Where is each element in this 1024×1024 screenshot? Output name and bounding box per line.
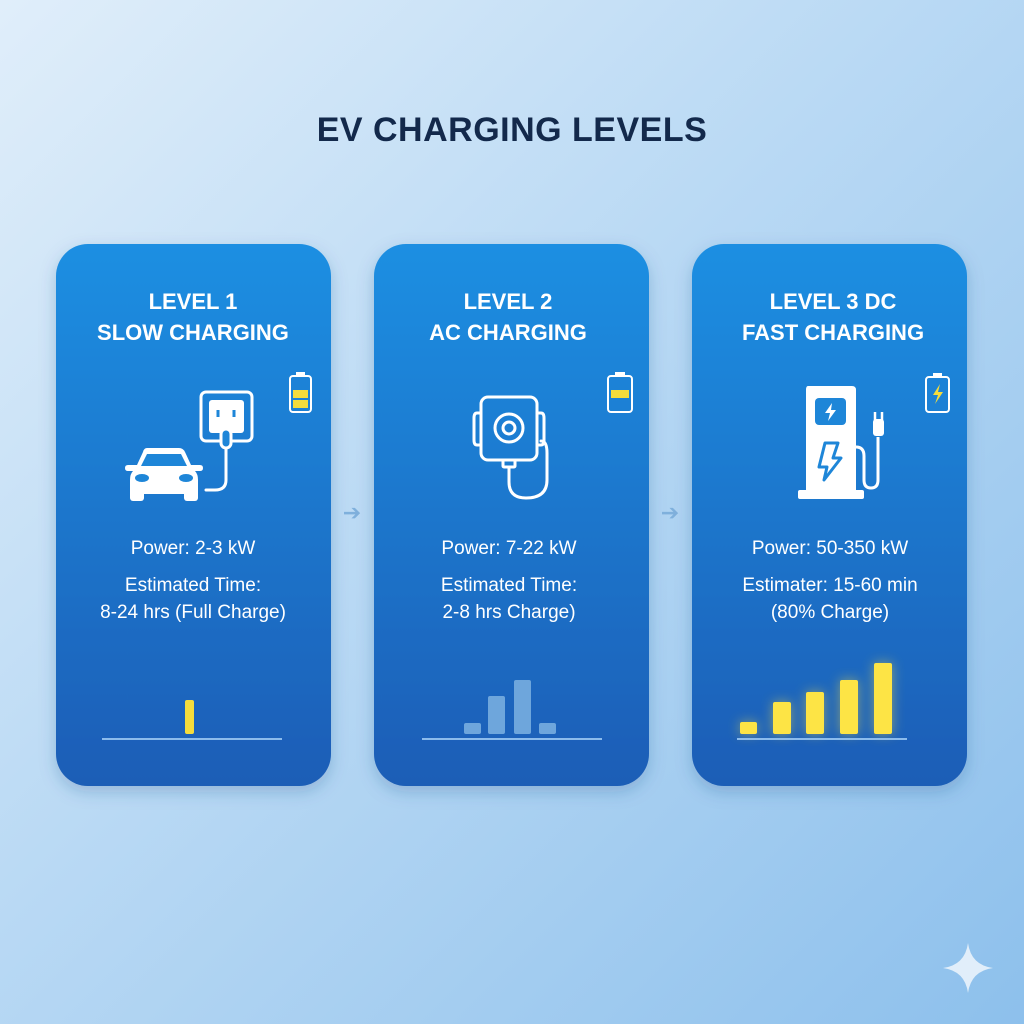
text: level 1 details: Power: 2-3 kW <box>131 538 255 559</box>
panel: level 3 <box>692 244 967 786</box>
heading: level 3: LEVEL 3 DC <box>770 289 896 314</box>
icon: battery level 1 <box>290 372 311 412</box>
heading: level 1: LEVEL 1 <box>149 289 237 314</box>
text: level 1 details: Estimated Time: <box>125 575 261 596</box>
arrow 2: ➔ <box>661 500 679 525</box>
icon: wall charger <box>474 397 547 498</box>
text: level 3 details: Estimater: 15-60 min <box>742 575 918 596</box>
icon: battery level 3 <box>926 373 949 412</box>
title: EV CHARGING LEVELS <box>317 111 707 149</box>
heading: level 3: FAST CHARGING <box>742 320 924 345</box>
chart: level 2 <box>422 680 602 739</box>
heading: level 2: LEVEL 2 <box>464 289 552 314</box>
icon: fast charging station <box>798 386 884 499</box>
arrow 1: ➔ <box>343 500 361 525</box>
chart: level 1 <box>102 700 282 739</box>
text: level 2 details: 2-8 hrs Charge) <box>442 602 576 623</box>
heading: level 1: SLOW CHARGING <box>97 320 289 345</box>
text: level 2 details: Estimated Time: <box>441 575 577 596</box>
text: level 1 details: 8-24 hrs (Full Charge) <box>100 602 286 623</box>
panel: level 1 <box>56 244 331 786</box>
heading: level 2: AC CHARGING <box>429 320 587 345</box>
text: level 3 details: Power: 50-350 kW <box>752 538 908 559</box>
icon: battery level 2 <box>608 372 632 412</box>
icon: sparkle <box>943 943 993 993</box>
icon: car with outlet <box>125 392 252 501</box>
text: level 3 details: (80% Charge) <box>771 602 889 623</box>
panel: level 2 <box>374 244 649 786</box>
text: level 2 details: Power: 7-22 kW <box>441 538 577 559</box>
chart: level 3 <box>737 663 907 739</box>
